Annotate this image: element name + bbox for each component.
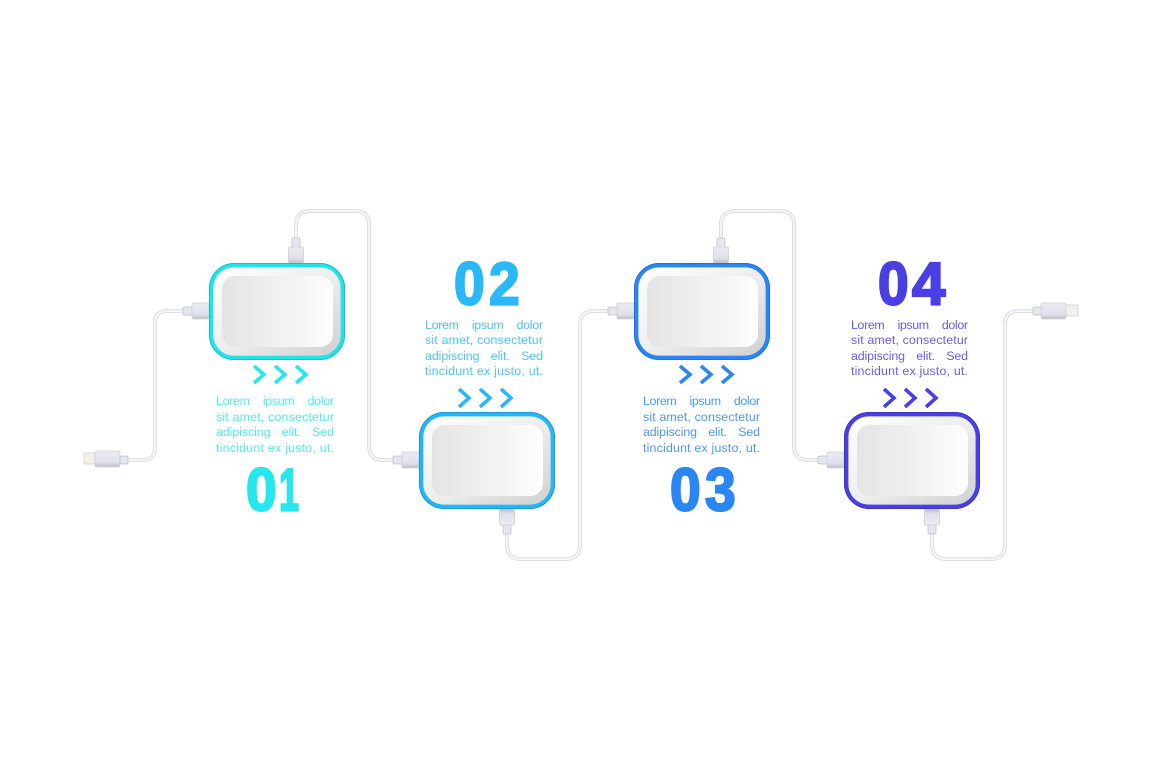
cable: device 4 to right plug <box>932 311 1034 559</box>
text block: step 2: sit amet, consectetur <box>425 333 543 347</box>
text block: step 3: Lorem ipsum dolor <box>643 394 760 408</box>
arrows: step 2 <box>459 389 511 407</box>
cable: device 3 to device 4 <box>721 211 820 460</box>
text block: step 1: tincidunt ex justo, ut. <box>216 441 334 455</box>
number: 04: 0 <box>878 251 909 318</box>
cable: device 1 to device 2 <box>296 211 395 460</box>
text block: step 2: adipiscing elit. Sed <box>425 349 543 363</box>
number: 02: 0 <box>454 251 485 318</box>
text block: step 4: Lorem ipsum dolor <box>851 318 968 332</box>
icon: lightning plug left <box>84 451 128 467</box>
text block: step 4: sit amet, consectetur <box>851 333 968 347</box>
panel: step 2 device <box>419 412 555 509</box>
connector set: device 4 <box>818 452 940 534</box>
number: 03: 3 <box>705 457 736 524</box>
panel: step 3 device <box>634 263 770 360</box>
text block: step 4 <box>851 318 968 378</box>
number: 03 <box>670 457 736 524</box>
text block: step 1: sit amet, consectetur <box>216 410 334 424</box>
number: 01: 0 <box>246 457 277 524</box>
text block: step 1 <box>216 394 334 455</box>
text block: step 2 <box>425 318 543 378</box>
arrows: step 1 <box>254 366 306 383</box>
text block: step 3: adipiscing elit. Sed <box>643 425 760 439</box>
cable: device 2 to device 3 <box>507 311 609 559</box>
text block: step 2: tincidunt ex justo, ut. <box>425 364 543 378</box>
text block: step 4: tincidunt ex justo, ut. <box>851 364 968 378</box>
text block: step 1: Lorem ipsum dolor <box>216 394 334 408</box>
number: 03: 0 <box>670 457 701 524</box>
number: 02: 2 <box>489 251 520 318</box>
number: 02 <box>454 251 520 318</box>
number: 04: 4 <box>912 250 946 318</box>
text block: step 3 <box>643 394 760 455</box>
text block: step 3: tincidunt ex justo, ut. <box>643 441 760 455</box>
connector set: device 1 <box>183 238 304 319</box>
arrows: step 3 <box>680 366 732 383</box>
connector set: device 2 <box>393 452 514 534</box>
text block: step 1: adipiscing elit. Sed <box>216 425 334 439</box>
icon: lightning plug right <box>1033 303 1078 319</box>
number: 01: 1 <box>279 457 299 524</box>
arrows: step 4 <box>884 389 936 407</box>
panel: step 4 device <box>844 412 980 509</box>
text block: step 4: adipiscing elit. Sed <box>851 349 968 363</box>
text block: step 2: Lorem ipsum dolor <box>425 318 543 332</box>
cable: left plug to device 1 <box>128 311 184 460</box>
number: 01 <box>246 457 299 524</box>
number: 04 <box>878 250 946 318</box>
panel: step 1 device <box>209 263 345 360</box>
text block: step 3: sit amet, consectetur <box>643 410 760 424</box>
connector set: device 3 <box>608 238 728 319</box>
